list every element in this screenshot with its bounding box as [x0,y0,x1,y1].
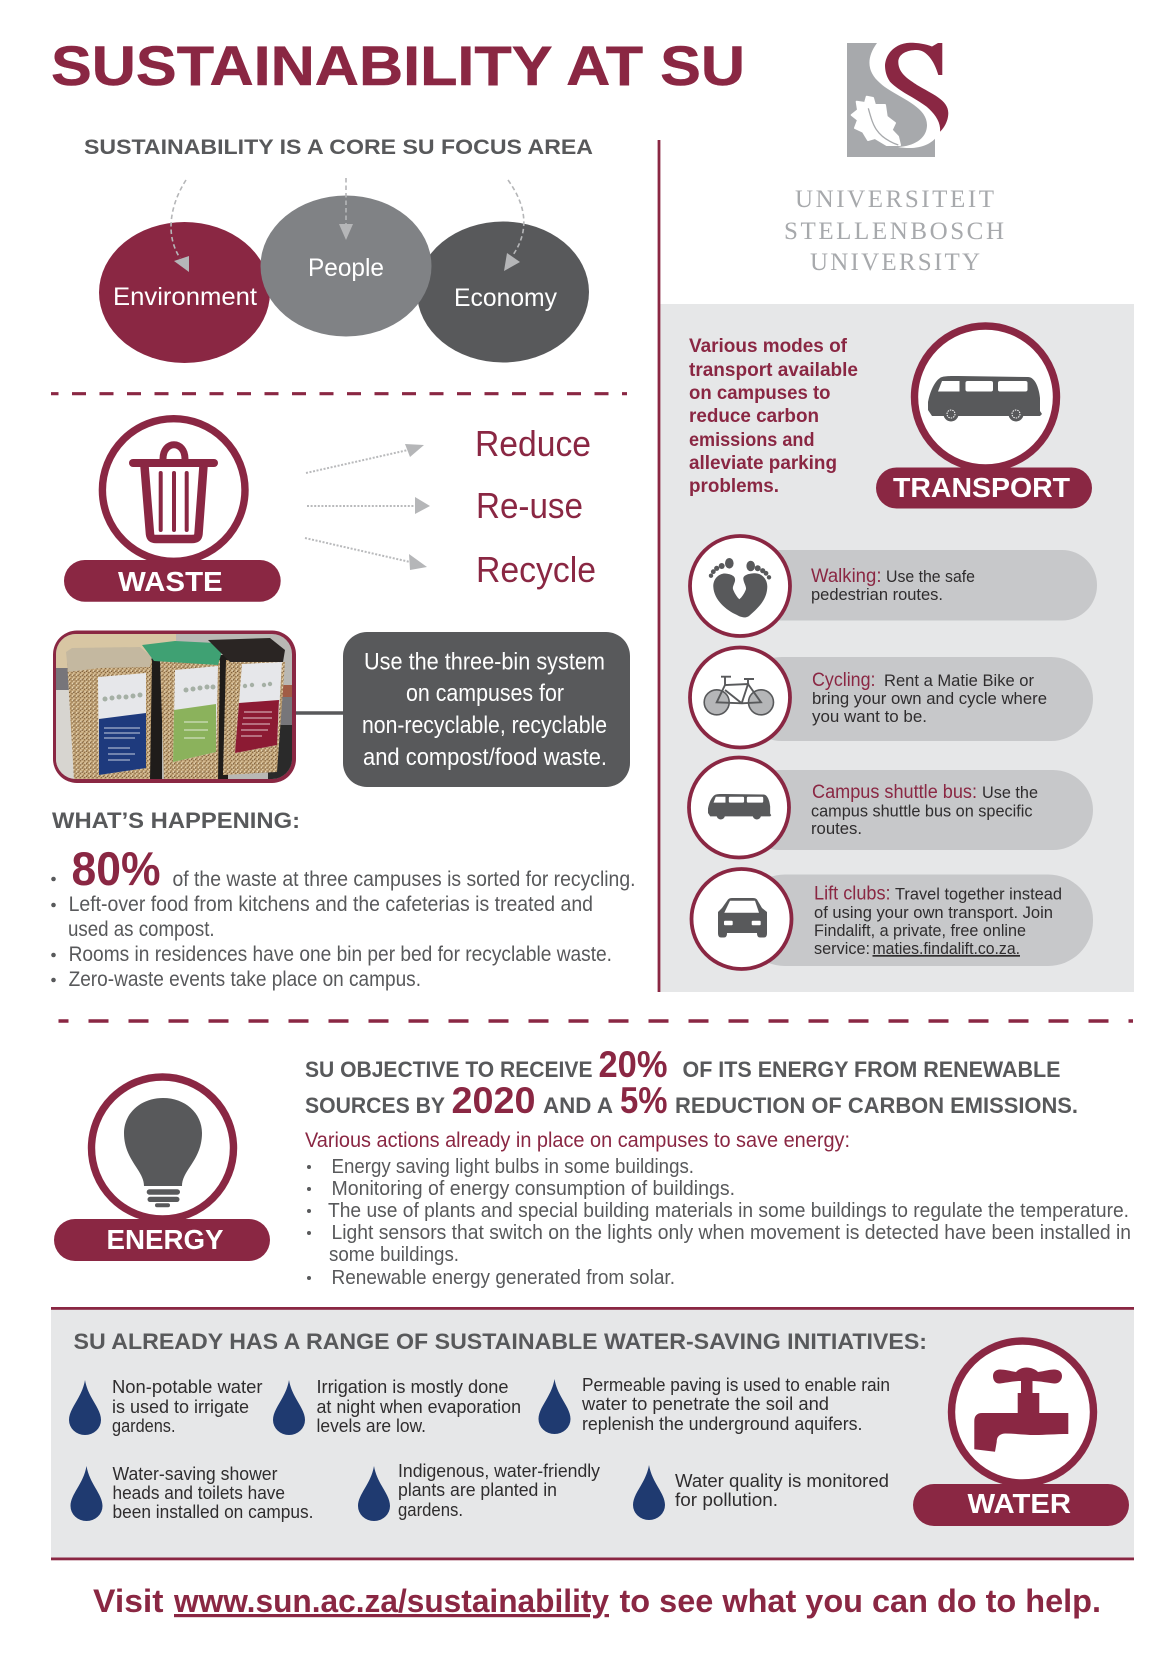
icon: energy bulb badge [54,1077,270,1261]
item: lift clubs: Lift clubs: [814,884,891,904]
callout: three-bin system: non-recyclable, recyclable [362,712,607,739]
text: water initiatives [112,1374,890,1522]
text: water initiatives: at night when evaporation [316,1396,521,1417]
title: SUSTAINABILITY AT SU [51,34,745,97]
text: water initiatives: Water-saving shower [112,1463,278,1484]
panel: transport [660,304,1134,992]
text: energy actions: Renewable energy generated from solar. [332,1267,675,1289]
callout: three-bin system: Use the three-bin system [364,648,605,676]
text: water initiatives: replenish the underground aquifers. [582,1413,862,1434]
text: reduce, re-use, recycle: Recycle [476,549,596,590]
heading: energy objective: OF ITS ENERGY FROM RENEWABLE [682,1057,1060,1082]
item: campus shuttle bus: campus shuttle bus on specific [811,802,1033,820]
icon: water tap badge [913,1341,1129,1526]
icon: energy bulb badge: ENERGY [106,1224,224,1255]
text: water initiatives: is used to irrigate [112,1396,249,1417]
text: transport intro: problems. [689,476,779,497]
text: water initiatives: been installed on campus. [112,1501,314,1522]
text: energy actions [305,1129,1131,1289]
heading: energy objective: SU OBJECTIVE TO RECEIVE [305,1057,592,1082]
heading: core focus area: SUSTAINABILITY IS A CORE SU FOCUS AREA [84,136,593,159]
text: waste facts: Left-over food from kitchens and the cafeterias is treated and [69,893,593,916]
panel: water [51,1307,1134,1560]
text: energy actions: Light sensors that switch on the lights only when movement is detected have been installed in [332,1222,1131,1244]
diagram: environment, people, economy: People [308,254,384,282]
diagram: environment, people, economy [99,178,589,363]
text: energy actions: The use of plants and special building materials in some buildings to regulate the temperature. [328,1200,1129,1222]
heading: energy objective: 5% [620,1080,668,1121]
footer call to action [93,1583,1101,1619]
text: transport intro [689,336,858,497]
heading: energy objective: AND A [543,1093,613,1118]
text: water initiatives: Water quality is monitored [675,1470,889,1491]
item: cycling [690,648,1093,748]
heading: water initiatives: SU ALREADY HAS A RANGE OF SUSTAINABLE WATER-SAVING INITIATIVES: [74,1329,927,1354]
icon: water tap badge: WATER [968,1488,1071,1519]
logo: Stellenbosch University [784,43,1004,276]
footer call to action: www.sun.ac.za/sustainability [173,1583,609,1619]
item: walking: Use the safe [886,567,975,586]
text: water initiatives: Permeable paving is used to enable rain [582,1374,890,1395]
heading: energy objective [305,1044,1078,1121]
item: lift clubs [692,869,1093,969]
text: transport intro: Various modes of [689,336,848,357]
text: water initiatives: heads and toilets have [112,1482,285,1503]
heading: energy objective: 2020 [452,1080,536,1121]
text: energy actions: Various actions already in place on campuses to save energy: [305,1129,850,1152]
item: campus shuttle bus [689,758,1093,858]
item: lift clubs: of using your own transport. Join [814,903,1053,922]
icons: water drops [69,1379,665,1521]
text: water initiatives: water to penetrate the soil and [581,1393,829,1414]
callout: three-bin system: and compost/food waste. [363,744,607,771]
text: transport intro: transport available [689,360,858,381]
item: lift clubs: Travel together instead [895,884,1062,904]
text: water initiatives: plants are planted in [398,1479,557,1500]
text: transport intro: alleviate parking [689,453,837,474]
photo: three bins [53,630,296,783]
text: energy actions: Energy saving light bulbs in some buildings. [332,1156,694,1178]
icon: transport van badge [876,326,1092,508]
text: reduce, re-use, recycle: Reduce [475,423,591,464]
footer call to action: to see what you can do to help. [620,1583,1101,1619]
text: water initiatives: gardens. [398,1499,463,1520]
item: lift clubs: Findalift, a private, free online [814,921,1026,940]
item: cycling: you want to be. [812,707,927,726]
logo: Stellenbosch University: UNIVERSITY [810,249,980,276]
arrows: waste hierarchy [305,444,430,570]
item: lift clubs: service: [814,939,870,958]
item: cycling: Cycling: [812,670,876,691]
item: walking: Walking: [811,566,882,587]
connector line [296,711,344,715]
item: walking: pedestrian routes. [811,585,943,604]
text: waste facts: Zero-waste events take place on campus. [69,968,421,991]
callout: three-bin system: on campuses for [406,680,564,707]
heading: what's happening: WHAT’S HAPPENING: [52,808,300,833]
text: reduce, re-use, recycle [475,423,596,590]
text: transport intro: emissions and [689,430,814,451]
diagram: environment, people, economy: Economy [454,284,557,312]
icon: car [718,898,767,938]
text: water initiatives: levels are low. [316,1415,426,1436]
heading: energy objective: SOURCES BY [305,1093,445,1118]
item: lift clubs: maties.findalift.co.za. [872,939,1020,958]
text: energy actions: Monitoring of energy consumption of buildings. [332,1178,735,1200]
text: waste facts: 80% [72,842,160,895]
text: water initiatives: Irrigation is mostly done [316,1376,508,1397]
icon: transport van badge: TRANSPORT [893,472,1070,503]
icon: footprints [709,558,771,617]
logo: Stellenbosch University: STELLENBOSCH [784,218,1004,245]
icon: bicycle [704,677,774,715]
text: waste facts: used as compost. [68,918,215,941]
text: transport intro: reduce carbon [689,406,819,427]
item: campus shuttle bus: routes. [811,819,862,838]
item: campus shuttle bus: Use the [982,783,1038,802]
icon: shuttle van [708,794,771,819]
icon: waste bin badge [64,419,281,602]
text: energy actions: some buildings. [329,1244,459,1266]
text: water initiatives: Non-potable water [112,1376,262,1397]
text: water initiatives: Indigenous, water-friendly [398,1460,601,1481]
text: waste facts: Rooms in residences have one bin per bed for recyclable waste. [69,943,612,966]
diagram: environment, people, economy: Environment [113,283,257,311]
text: reduce, re-use, recycle: Re-use [476,485,583,526]
text: water initiatives: for pollution. [675,1489,778,1510]
heading: energy objective: 20% [598,1044,668,1085]
heading: energy objective: REDUCTION OF CARBON EMISSIONS. [675,1093,1078,1118]
item: walking [690,536,1097,636]
logo: Stellenbosch University: UNIVERSITEIT [795,186,994,213]
item: cycling: bring your own and cycle where [812,689,1047,708]
text: waste facts: of the waste at three campuses is sorted for recycling. [172,868,636,891]
footer call to action: Visit [93,1583,164,1619]
icon: waste bin badge: WASTE [118,566,223,597]
text: water initiatives: gardens. [112,1415,176,1436]
text: transport intro: on campuses to [689,383,830,404]
item: cycling: Rent a Matie Bike or [884,671,1034,690]
text: waste facts [51,842,635,991]
callout: three-bin system [343,632,630,787]
item: campus shuttle bus: Campus shuttle bus: [812,782,977,803]
